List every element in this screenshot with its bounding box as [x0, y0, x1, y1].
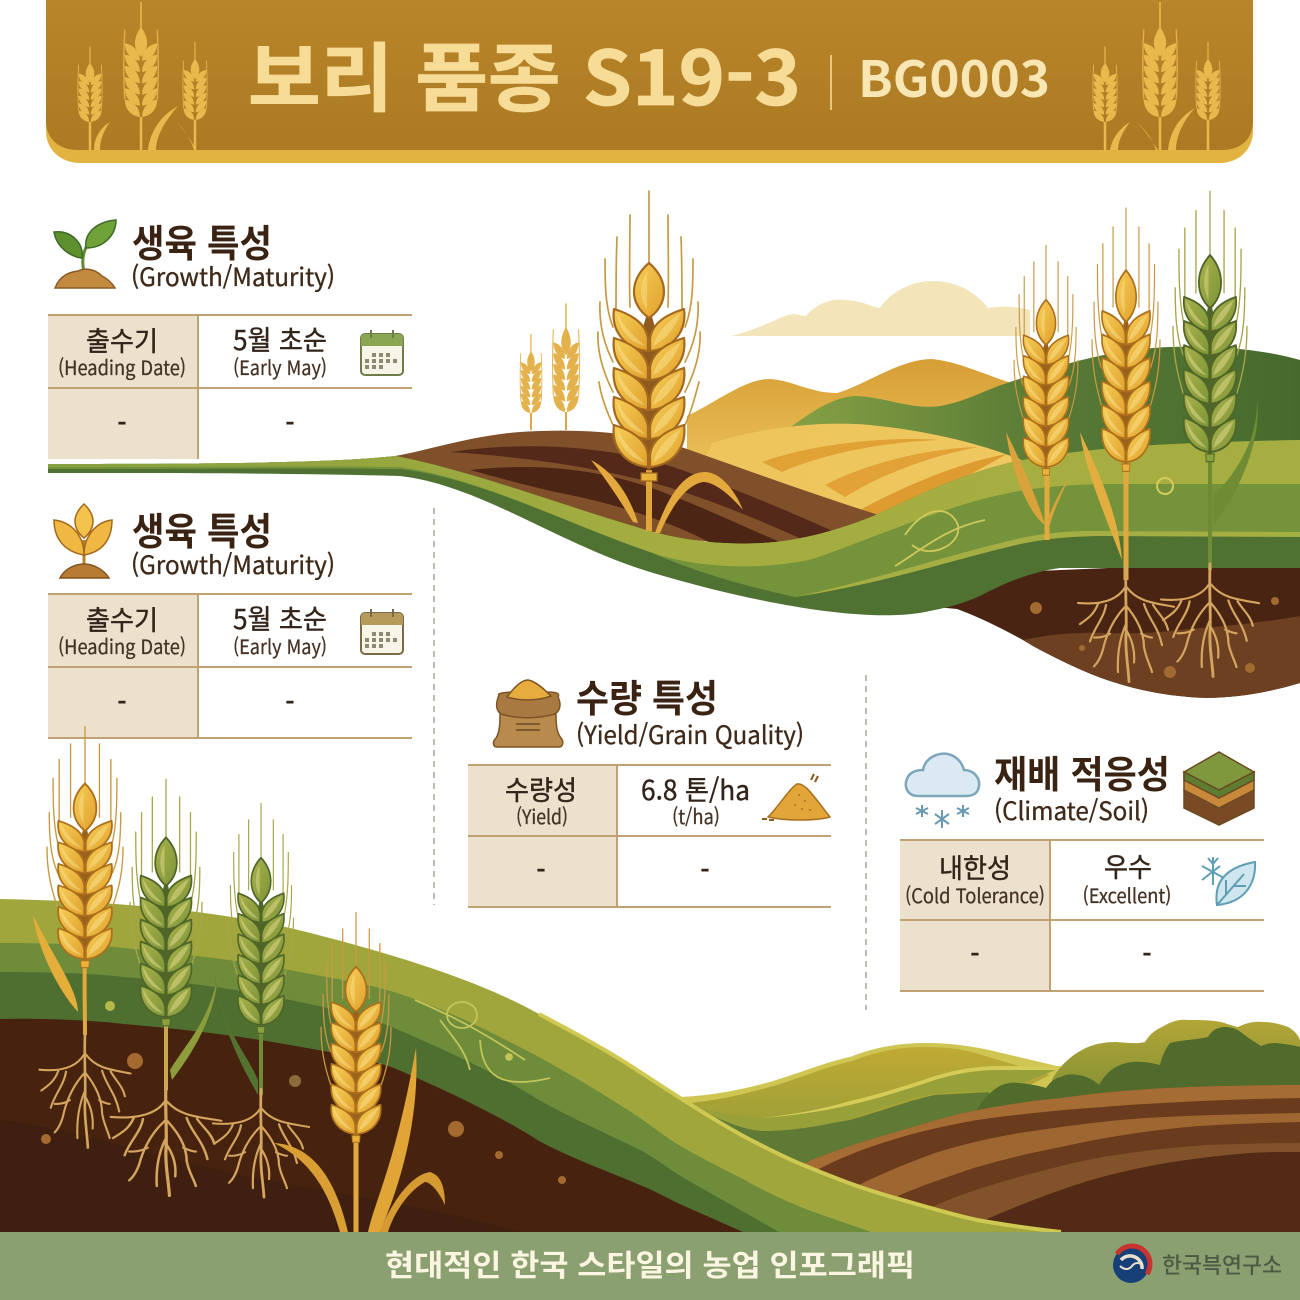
panel: yield — [468, 668, 831, 907]
table: yield: (Yield) — [516, 801, 568, 830]
table: cold tolerance: - — [970, 935, 980, 972]
hill: olive layer — [0, 899, 1061, 1232]
header banner — [46, 0, 1253, 163]
wheat: right green plant — [1161, 191, 1259, 677]
divider: dashed left — [433, 508, 435, 905]
icon: grain sack — [493, 680, 563, 747]
table: heading date: (Heading Date) — [58, 631, 186, 660]
hill: dark green layer — [0, 972, 779, 1232]
footer bar — [0, 1232, 1300, 1300]
table: heading date: 출수기 — [86, 599, 158, 638]
golden field — [700, 424, 1040, 530]
icon: frost leaf — [1202, 857, 1255, 905]
illustration: bottom landscape — [0, 727, 1300, 1232]
decorative swirls — [415, 1000, 550, 1082]
table: heading date: (Heading Date) — [58, 352, 186, 381]
table: yield: 6.8 톤/ha — [641, 769, 750, 808]
table: heading date — [48, 594, 412, 738]
wheat: gold plant A — [33, 727, 131, 1148]
table: cold tolerance: (Excellent) — [1082, 880, 1172, 909]
illustration: top landscape — [48, 191, 1300, 698]
table: heading date: (Early May) — [233, 631, 327, 660]
table: cold tolerance: - — [1142, 935, 1152, 972]
section title: 생육 특성 — [132, 501, 272, 556]
table: heading date — [48, 315, 412, 459]
green hill — [791, 347, 1300, 470]
icon: wheat left — [78, 2, 207, 150]
table: heading date: (Early May) — [233, 352, 327, 381]
section subtitle: (Yield/Grain Quality) — [576, 716, 804, 752]
table: heading date: - — [285, 404, 295, 441]
wheat: gold plant D — [274, 913, 445, 1232]
panel: climate and soil — [900, 744, 1264, 991]
icon: gold sprout — [54, 504, 112, 578]
gold mountains — [687, 359, 1012, 480]
section title: 생육 특성 — [132, 213, 272, 268]
wheat: right gold plant 1 — [1006, 246, 1078, 540]
hill: soil — [0, 1001, 743, 1232]
table: yield — [468, 765, 831, 907]
table: heading date: 출수기 — [86, 320, 158, 359]
panel: growth 1 — [48, 213, 412, 459]
table: heading date: - — [117, 683, 127, 720]
wheat: right gold plant 2 — [1078, 208, 1174, 682]
table: cold tolerance — [900, 840, 1264, 991]
hill: mid green layer — [0, 943, 871, 1232]
icon: wheat right — [1093, 2, 1220, 150]
table: heading date: - — [285, 683, 295, 720]
table: heading date: 5월 초순 — [233, 598, 327, 637]
table: yield: - — [700, 851, 710, 888]
title: 보리 품종 S19-3 — [248, 18, 801, 127]
icon: cloud and snow — [906, 754, 979, 828]
section subtitle: (Growth/Maturity) — [131, 546, 335, 582]
logo: taegeuk emblem — [1113, 1246, 1150, 1283]
wheat: green plant B — [111, 779, 221, 1196]
wheat: small pair — [520, 303, 579, 430]
cloud — [731, 281, 1030, 336]
brown fields — [800, 1085, 1300, 1232]
table: heading date: 5월 초순 — [233, 319, 327, 358]
hill: lime edge — [539, 1014, 1061, 1232]
icon: green sprout — [54, 220, 116, 288]
table: heading date: - — [117, 404, 127, 441]
table: yield: 수량성 — [505, 769, 577, 808]
icon: calendar — [361, 330, 403, 375]
wheat: green plant C — [213, 804, 309, 1197]
distant hills — [680, 1020, 1300, 1180]
section subtitle: (Climate/Soil) — [994, 792, 1149, 828]
section subtitle: (Growth/Maturity) — [131, 258, 335, 294]
divider: dashed right — [865, 675, 867, 1010]
footer caption: 현대적인 한국 스타일의 농업 인포그래픽 — [385, 1241, 915, 1285]
table: yield: (t/ha) — [672, 801, 720, 830]
brown hill — [395, 431, 882, 550]
wheat: main plant — [591, 191, 743, 533]
icon: calendar — [361, 609, 403, 654]
table: yield: - — [536, 851, 546, 888]
icon: soil cube — [1184, 752, 1254, 825]
soil layer — [700, 560, 1300, 698]
variety code: BG0003 — [858, 40, 1050, 112]
section title: 수량 특성 — [576, 668, 718, 723]
logo: organization name: 한국븍연구소 — [1162, 1248, 1282, 1280]
table: cold tolerance: 내한성 — [939, 847, 1011, 886]
table: cold tolerance: 우수 — [1104, 846, 1152, 885]
green wave band — [48, 440, 1300, 615]
table: cold tolerance: (Cold Tolerance) — [905, 880, 1045, 909]
panel: growth 2 — [48, 501, 412, 738]
icon: grain pile — [762, 774, 830, 820]
section title: 재배 적응성 — [994, 744, 1170, 799]
